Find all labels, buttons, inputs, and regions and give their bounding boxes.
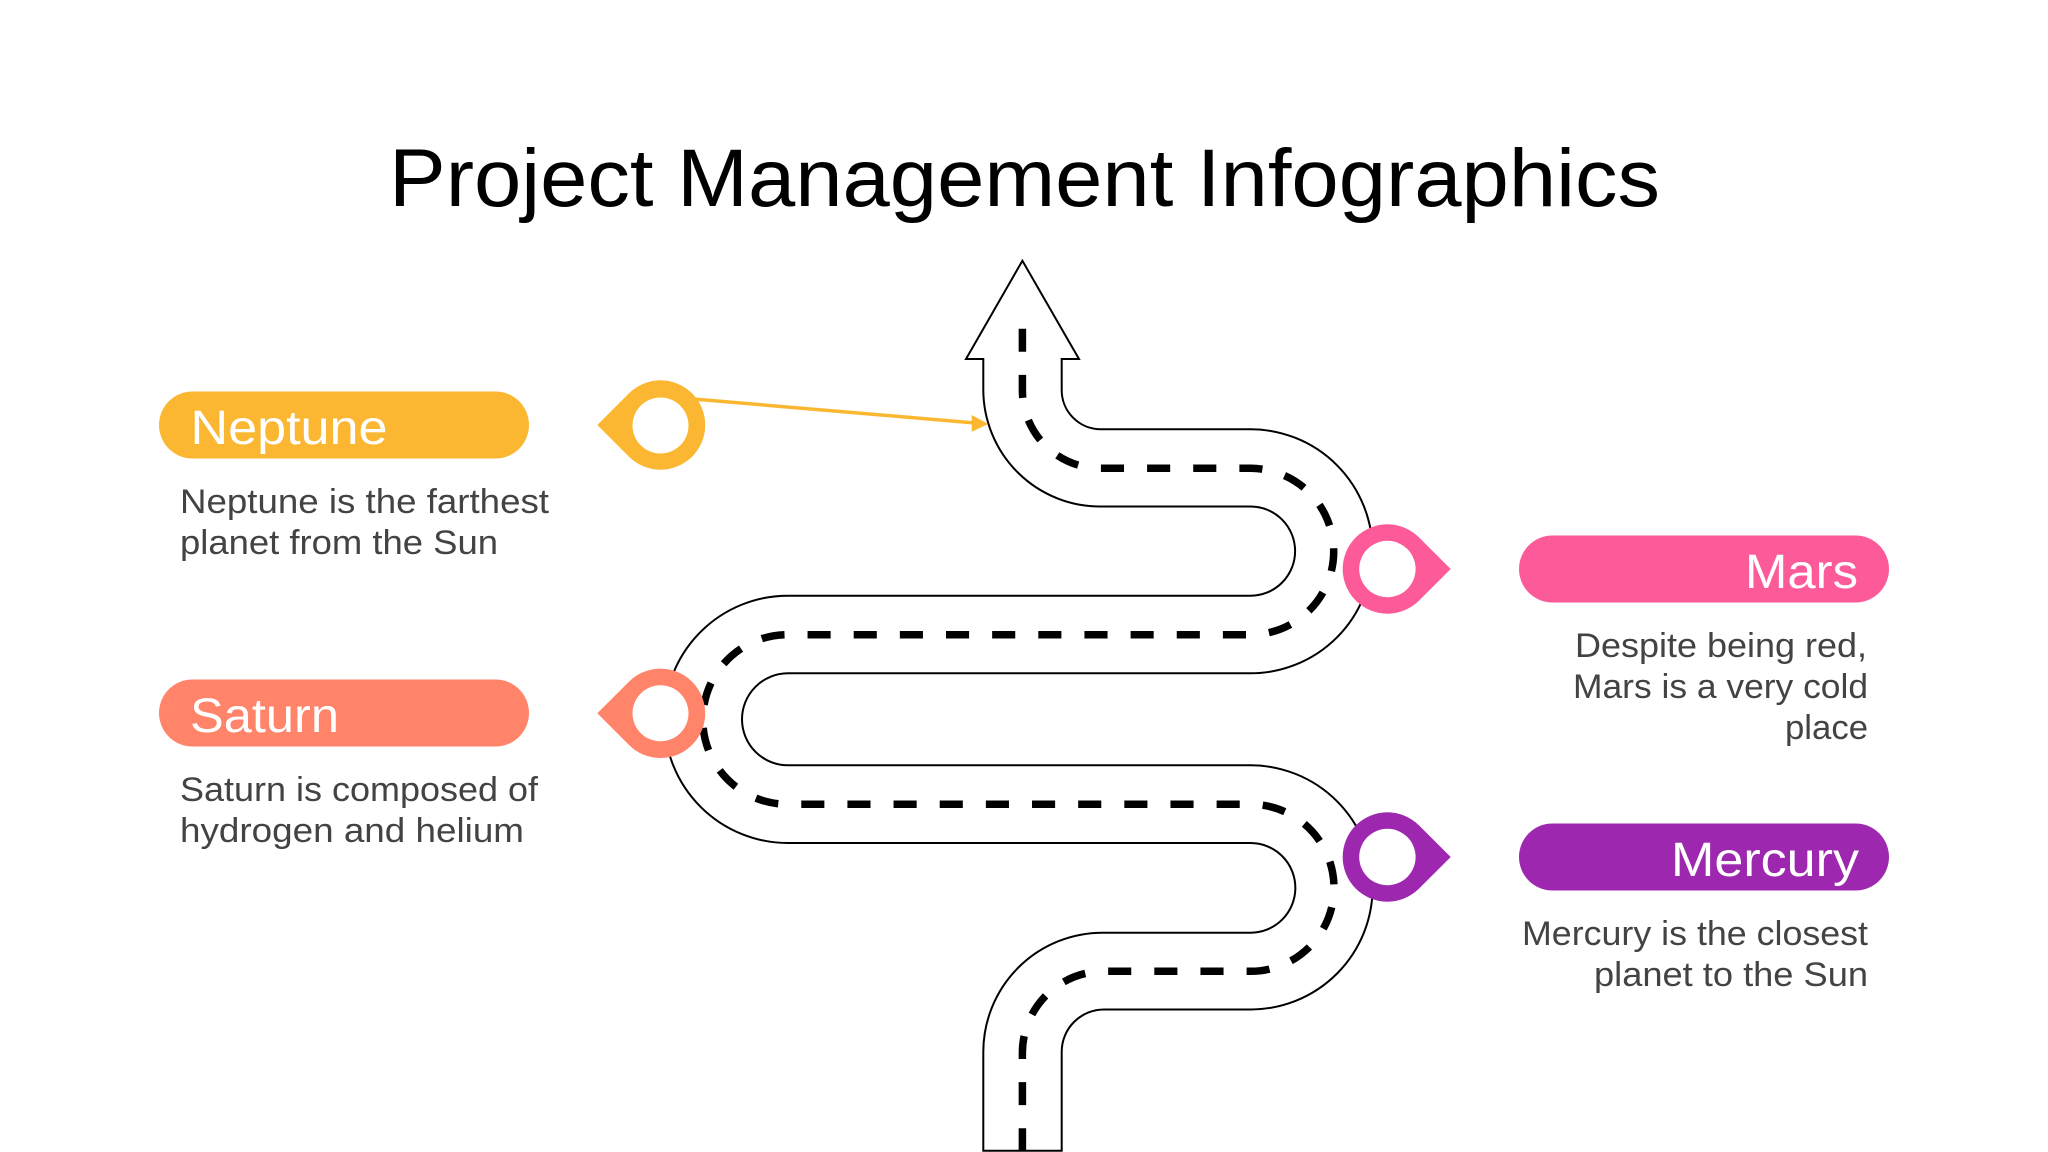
- pill: Neptune: Neptune: [190, 402, 388, 455]
- pin: Mars: [1343, 524, 1451, 614]
- pin: Mercury: [1343, 812, 1451, 902]
- panel: Neptune: [159, 392, 550, 562]
- pill: Mercury: Mercury: [1671, 834, 1859, 887]
- description: Mercury: [1522, 915, 1869, 994]
- panel: Mars: [1519, 536, 1889, 747]
- description: Mercury: Mercury is the closest: [1522, 915, 1869, 953]
- road centre dashes: [703, 329, 1334, 1152]
- description: Saturn: [180, 771, 539, 850]
- pill: Neptune: [159, 392, 529, 458]
- title: Project Management Infographics: [389, 133, 1660, 224]
- pill: Saturn: Saturn: [190, 690, 339, 743]
- pill: Mercury: [1519, 824, 1889, 890]
- description: Neptune: planet from the Sun: [180, 524, 498, 562]
- description: Mars: place: [1785, 709, 1868, 747]
- road with arrow head: [664, 261, 1373, 1152]
- arrow: Neptune pin to road: [690, 399, 988, 432]
- road outline: [664, 261, 1373, 1151]
- description: Saturn: Saturn is composed of: [180, 771, 539, 809]
- pin: Saturn: [597, 669, 705, 758]
- pill: Saturn: [159, 680, 529, 746]
- panel: Mercury: [1519, 824, 1889, 994]
- panel: Saturn: [159, 680, 539, 850]
- description: Neptune: Neptune is the farthest: [180, 483, 550, 521]
- description: Mars: Mars is a very cold: [1573, 668, 1868, 706]
- pill: Mars: Mars: [1745, 546, 1858, 599]
- description: Neptune: [180, 483, 550, 562]
- pill: Mars: [1519, 536, 1889, 602]
- description: Mars: Despite being red,: [1575, 627, 1867, 665]
- description: Mercury: planet to the Sun: [1594, 956, 1868, 994]
- description: Mars: [1573, 627, 1868, 747]
- description: Saturn: hydrogen and helium: [180, 812, 524, 850]
- pin: Neptune: [597, 380, 705, 470]
